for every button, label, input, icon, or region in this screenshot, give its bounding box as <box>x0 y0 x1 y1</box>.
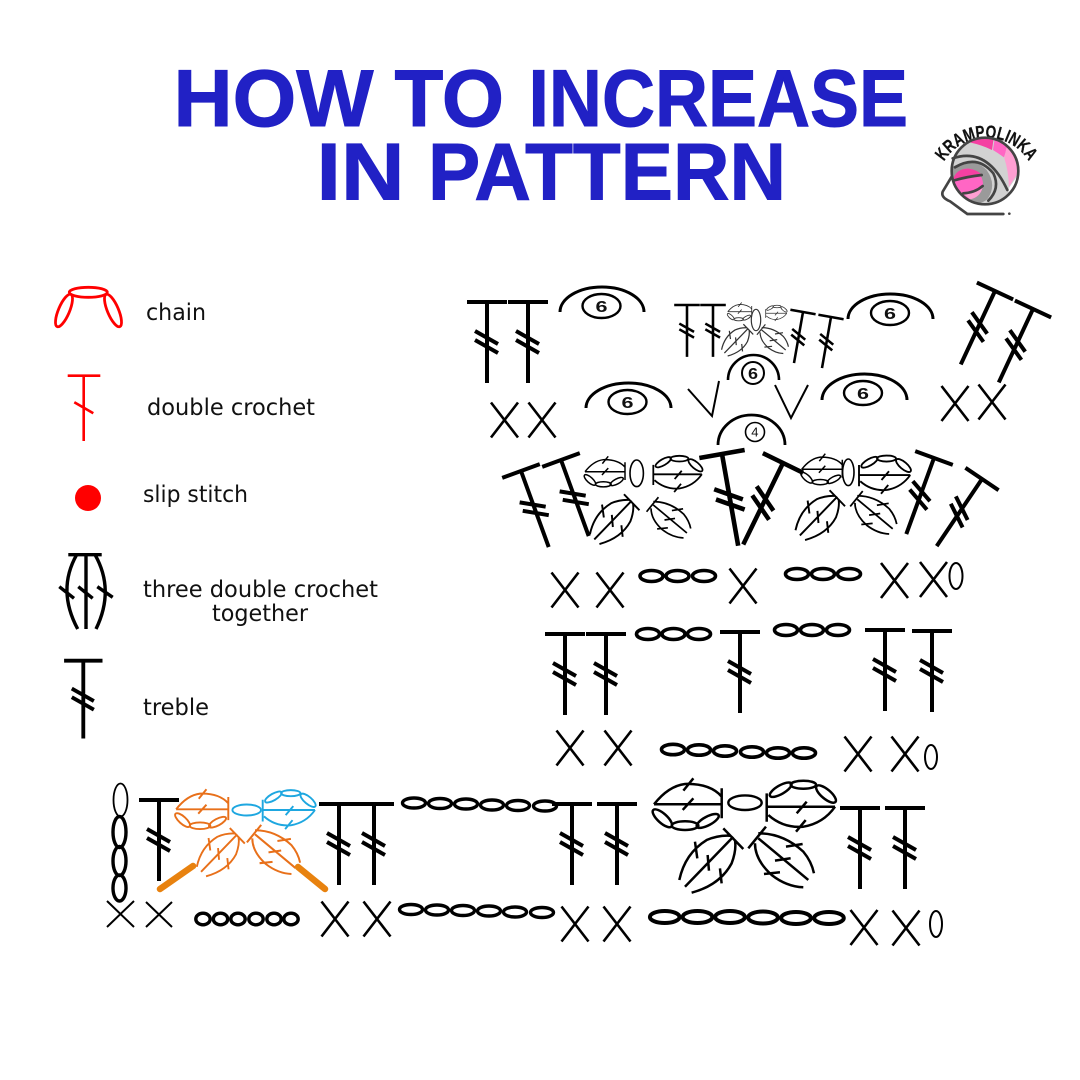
chain arc of 6: 6 <box>622 395 634 412</box>
black fan of clusters <box>650 778 838 893</box>
tilted trebles left <box>502 453 607 554</box>
small chain arc of 6 <box>728 355 779 384</box>
title: PATTERN <box>428 128 786 218</box>
chain arc of 6: 6 <box>596 299 608 316</box>
logo: krampolinka yarn ball <box>934 125 1037 216</box>
title <box>174 54 908 218</box>
single crochets <box>322 902 390 936</box>
chain of 6 <box>196 913 298 925</box>
pattern row 1: trebles, chain arcs and small fan <box>467 283 1051 391</box>
legend: chain label: chain <box>146 300 206 326</box>
title: IN <box>316 128 404 218</box>
logo: krampolinka yarn ball: KRAMPOLINKA <box>934 125 1037 162</box>
title: TO <box>394 54 504 144</box>
chain arc of 6 <box>586 383 671 414</box>
legend: three double crochet together label <box>143 577 378 627</box>
pattern row 7: highlighted increase fan and trebles <box>113 778 925 901</box>
single crochets <box>562 906 630 942</box>
trebles <box>552 804 637 885</box>
chain of 6 <box>662 744 816 758</box>
trebles <box>545 634 626 715</box>
single crochets <box>844 736 918 772</box>
vertical chain <box>113 784 128 901</box>
chain arc of 6: 6 <box>884 306 896 323</box>
pattern row 4: single crochets and chains <box>552 562 962 608</box>
legend: slip stitch icon <box>75 485 101 511</box>
chain of 6 <box>400 904 554 918</box>
trebles <box>467 302 548 383</box>
chain of 3 <box>640 570 716 582</box>
small fan of clusters <box>722 302 788 356</box>
single crochet <box>730 568 756 604</box>
legend: treble icon <box>64 661 102 738</box>
pattern row 8: foundation single crochets and chains <box>107 901 942 946</box>
fan of clusters right <box>796 454 913 540</box>
chain of 3 <box>786 568 860 580</box>
orange and blue highlighted fan <box>160 789 325 889</box>
pattern row 5: trebles and chains <box>545 624 952 715</box>
legend: treble label: treble <box>143 695 209 721</box>
single crochets <box>107 901 172 927</box>
trebles <box>840 808 925 889</box>
legend: three double crochet together label: together <box>212 601 309 627</box>
treble <box>720 632 760 713</box>
turning chain <box>930 911 942 937</box>
legend: slip stitch label: slip stitch <box>143 482 248 508</box>
chain arc of 6 <box>848 294 933 325</box>
chain arc of 4 <box>718 415 785 445</box>
legend: chain icon <box>52 287 125 329</box>
pattern row 3: fans with arc of 4 <box>502 415 999 557</box>
single crochets <box>552 572 624 608</box>
turning chain <box>950 563 962 589</box>
legend: double crochet icon <box>68 376 100 441</box>
legend: three double crochet together label: three double crochet <box>143 577 378 603</box>
tilted trebles right <box>888 451 999 557</box>
chain arc of 6: 6 <box>857 386 869 403</box>
single crochets <box>556 730 632 766</box>
chain of 6 <box>402 798 556 811</box>
trebles <box>319 804 394 885</box>
treble <box>139 800 179 881</box>
pattern row 6: single crochets and chain of 6 <box>556 730 937 772</box>
pattern row 2: single crochets, arcs and V stitches <box>491 355 1006 438</box>
title: HOW <box>174 54 374 144</box>
fan of clusters left <box>583 455 704 544</box>
single crochets <box>881 562 947 598</box>
chain of 3 <box>636 628 710 640</box>
single crochets <box>850 910 920 946</box>
small chain arc of 6: 6 <box>748 366 758 383</box>
V stitch <box>688 381 719 416</box>
trebles <box>865 630 952 712</box>
legend: three double crochet together icon <box>59 555 113 629</box>
chain arc of 6 <box>822 374 907 405</box>
chain arc of 6 <box>560 287 644 318</box>
large chain of 6 <box>650 911 844 924</box>
turning chain <box>925 745 937 769</box>
chain arc of 4: 4 <box>751 424 759 440</box>
chain of 3 <box>774 624 850 636</box>
tilted trebles <box>943 283 1051 391</box>
legend <box>52 287 378 738</box>
single crochets <box>491 402 556 438</box>
V stitch <box>775 385 808 418</box>
tilted small trebles <box>781 310 844 370</box>
small trebles <box>674 305 726 357</box>
title: INCREASE <box>528 54 908 144</box>
single crochets <box>942 384 1006 421</box>
legend: double crochet label: double crochet <box>147 395 315 421</box>
central tilted trebles <box>699 450 803 554</box>
